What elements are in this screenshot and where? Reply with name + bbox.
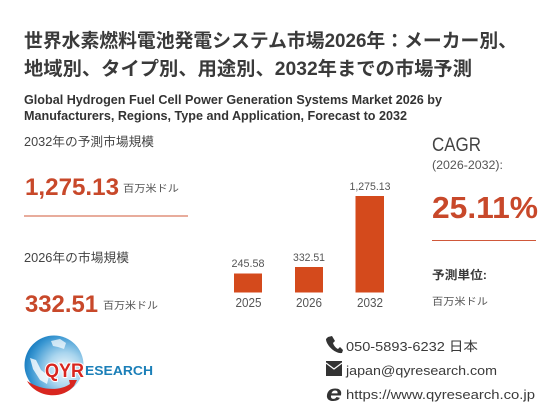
value: 332.51: 332.51 [25, 291, 98, 318]
unit: million USD: 百万米ドル [432, 295, 488, 308]
subtitle: English: Global Hydrogen Fuel Cell Power Generation Systems Market 2026 by [24, 93, 442, 107]
logo text: QYR [45, 361, 84, 382]
value: 1,275.13: 1,275.13 [25, 174, 119, 201]
label: 2026 market size: 2026年の市場規模 [24, 250, 130, 265]
title: Japanese [24, 29, 517, 80]
bar 2032: 1,275.13 [350, 181, 390, 193]
bar 2026 [293, 252, 325, 310]
value: 25.11%: 25.11% [432, 190, 538, 225]
email: japan@qyresearch.com [345, 363, 497, 378]
bar 2025: 2025 [236, 296, 262, 310]
icon: phone [326, 336, 343, 353]
bar 2032: 2032 [357, 296, 383, 310]
bar 2025: 245.58 [232, 258, 264, 270]
bar 2032 [350, 181, 390, 310]
panel: 2032 forecast market size [24, 134, 188, 216]
bar 2025 [232, 258, 264, 310]
subtitle: English [24, 93, 442, 123]
phone number: 050-5893-6232 日本 [346, 339, 478, 354]
icon: red swoosh [27, 380, 77, 395]
unit: million USD: 百万米ドル [123, 182, 179, 195]
logo: QYResearch [24, 336, 153, 395]
panel: 2026 market size [24, 250, 158, 318]
bar chart [232, 181, 390, 310]
title: Japanese: 世界水素燃料電池発電システム市場2026年：メーカー別、 [24, 29, 517, 52]
label: forecast unit: 予測単位: [432, 267, 487, 282]
title: Japanese: 地域別、タイプ別、用途別、2032年までの市場予測 [24, 57, 472, 80]
contact details [326, 336, 535, 406]
bar 2026: 2026 [296, 296, 322, 310]
panel: CAGR [432, 135, 538, 308]
subtitle: English: Manufacturers, Regions, Type and Application, Forecast to 2032 [24, 109, 407, 123]
unit: million USD: 百万米ドル [103, 299, 158, 312]
logo text: ESEARCH [85, 364, 153, 378]
bar 2026: 332.51 [293, 252, 325, 264]
label: period: (2026-2032): [432, 160, 503, 172]
icon: mail [326, 361, 342, 376]
logo text [45, 361, 153, 382]
label: 2032 forecast: 2032年の予測市場規模 [24, 134, 155, 149]
website: https://www.qyresearch.co.jp [346, 387, 535, 402]
icon: web: e [326, 380, 342, 406]
label: CAGR: CAGR [432, 135, 481, 156]
icon: globe [24, 336, 84, 394]
